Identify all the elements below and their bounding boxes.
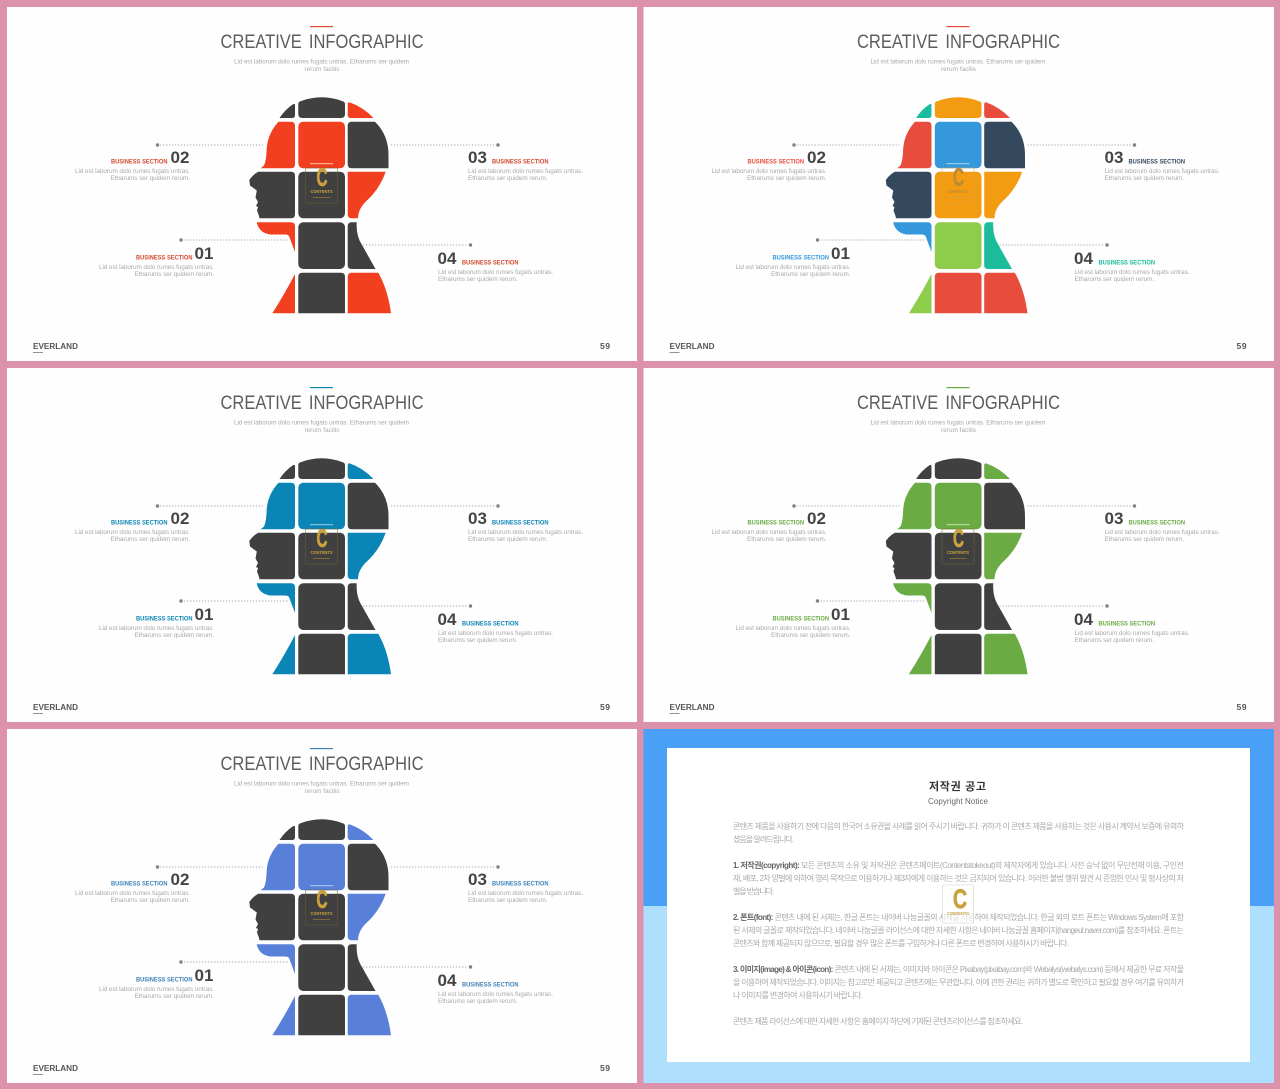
- callout 01: 01: [831, 244, 850, 263]
- footer: EVERLAND: [33, 341, 78, 351]
- logo watermark: CONTENTS: [947, 189, 969, 194]
- font clause: 콘텐츠와 함께 제공되지 않으므로, 필요할 경우 많은 폰트를 구입하거나 다른 폰트로 변경하여 사용하시기 바랍니다.: [733, 938, 1069, 948]
- subtitle: rerum facilis: [304, 427, 340, 434]
- logo watermark: C: [953, 525, 964, 553]
- subtitle: Lid est laborum dolo rumes fugats untras. Etharums ser quidem: [234, 780, 409, 788]
- callout 02: Etharums ser quidem rerum.: [747, 175, 827, 182]
- logo watermark: [942, 524, 974, 564]
- head silhouette: [886, 97, 1028, 313]
- panel: red theme slide: [7, 7, 637, 361]
- callout 03: 03: [1104, 509, 1123, 528]
- callout 02: 02: [170, 509, 189, 528]
- callout 01: BUSINESS SECTION: [772, 254, 829, 262]
- callout 02: Etharums ser quidem rerum.: [110, 536, 190, 543]
- callout 03: Lid est laborum dolo rumes fugats untras.: [1104, 529, 1220, 536]
- callout 03: BUSINESS SECTION: [492, 158, 549, 166]
- panel: green theme slide: [644, 368, 1274, 722]
- title: CREATIVE INFOGRAPHIC: [220, 31, 424, 53]
- panel: multicolor slide: [644, 7, 1274, 361]
- title accent line: [310, 748, 333, 749]
- callout 02: Lid est laborum dolo rumes fugats untras.: [712, 529, 827, 536]
- callout 03: Etharums ser quidem rerum.: [1104, 536, 1184, 543]
- callout 02: [712, 143, 900, 182]
- callout 01: BUSINESS SECTION: [136, 616, 193, 622]
- subtitle: Lid est laborum dolo rumes fugats untras. Etharums ser quidem: [870, 420, 1046, 426]
- footer: 59: [1236, 341, 1247, 351]
- subtitle: rerum facilis: [304, 66, 340, 73]
- subtitle: rerum facilis: [941, 66, 976, 73]
- callout 02: BUSINESS SECTION: [748, 520, 804, 526]
- callout 01: [99, 960, 288, 1000]
- image and icon clause: 나 이미지를 변경하여 사용하시기 바랍니다.: [733, 990, 863, 1000]
- callout 04: Lid est laborum dolo rumes fugats untras.: [438, 269, 553, 276]
- logo watermark: CONTENTS: [310, 189, 332, 194]
- title: CREATIVE INFOGRAPHIC: [857, 31, 1060, 53]
- font clause: [733, 912, 1185, 948]
- callout 01: Lid est laborum dolo rumes fugats untras.: [736, 264, 851, 271]
- callout 04: Etharums ser quidem rerum.: [438, 998, 518, 1005]
- callout 02: Lid est laborum dolo rumes fugats untras.: [75, 529, 190, 536]
- callout 04: Lid est laborum dolo rumes fugats untras.: [438, 991, 553, 998]
- callout 01: 01: [831, 605, 850, 624]
- logo watermark: [942, 884, 974, 923]
- callout 03: 03: [468, 509, 487, 528]
- callout 03: [391, 143, 583, 182]
- callout 03: Lid est laborum dolo rumes fugats untras.: [468, 890, 583, 897]
- callout 04: Etharums ser quidem rerum.: [438, 276, 518, 283]
- callout 02: Etharums ser quidem rerum.: [747, 536, 827, 543]
- callout 03: BUSINESS SECTION: [1128, 520, 1185, 526]
- callout 03: Etharums ser quidem rerum.: [468, 175, 548, 182]
- callout 03: Lid est laborum dolo rumes fugats untras.: [1104, 168, 1220, 175]
- callout 02: Etharums ser quidem rerum.: [110, 897, 190, 904]
- callout 04: BUSINESS SECTION: [1098, 260, 1155, 266]
- callout 02: 02: [807, 148, 826, 167]
- callout 04: Etharums ser quidem rerum.: [1074, 637, 1154, 644]
- callout 03: Etharums ser quidem rerum.: [468, 897, 548, 904]
- footer: 59: [600, 341, 610, 351]
- callout 04: [1000, 243, 1190, 283]
- callout 02: [712, 504, 900, 543]
- panel: copyright notice: [644, 729, 1274, 1083]
- title: CREATIVE INFOGRAPHIC: [220, 753, 424, 775]
- subtitle: rerum facilis: [304, 788, 340, 795]
- title accent line: [310, 387, 333, 388]
- title: CREATIVE INFOGRAPHIC: [857, 392, 1060, 414]
- title accent line: [946, 387, 970, 388]
- callout 03: 03: [468, 148, 487, 167]
- callout 02: Lid est laborum dolo rumes fugats untras.: [75, 168, 190, 175]
- callout 02: BUSINESS SECTION: [111, 520, 168, 526]
- callout 04: BUSINESS SECTION: [462, 260, 519, 266]
- callout 02: 02: [170, 148, 189, 167]
- subtitle: rerum facilis: [941, 427, 976, 434]
- callout 04: [363, 965, 553, 1005]
- license note: 콘텐츠 제품 라이선스에 대한 자세한 사항은 홈페이지 하단에 기재된 콘텐츠라이선스를 참조하세요.: [733, 1016, 1023, 1026]
- footer: [670, 341, 1247, 353]
- intro paragraph: 셨음을 알려드립니다.: [733, 834, 794, 844]
- callout 03: [391, 504, 583, 543]
- callout 03: [1028, 143, 1220, 182]
- callout 02: BUSINESS SECTION: [111, 158, 168, 166]
- callout 01: [736, 599, 924, 639]
- callout 04: BUSINESS SECTION: [462, 982, 519, 988]
- image and icon clause: 을 이용하여 제작되었습니다. 이미지는 참고로만 제공되고 콘텐츠에는 무관합니다. 이에 관한 권리는 귀하가 별도로 확인하고 필요할 경우 여기를 유의하거: [733, 977, 1184, 987]
- footer: [33, 702, 610, 714]
- subtitle: [234, 780, 409, 795]
- callout 03: [1028, 504, 1220, 543]
- callout 01: [736, 238, 924, 278]
- callout 03: 03: [468, 870, 487, 889]
- callout 04: [1000, 604, 1190, 644]
- copyright clause: 1. 저작권(copyright): 모든 콘텐츠의 소유 및 저작권은 콘텐츠메이트(Contentstokeout)의 제작자에게 있습니다. 사전 승낙 없이 무단전재 이용, 구인전: [733, 860, 1184, 870]
- footer: EVERLAND: [670, 702, 714, 712]
- callout 01: [99, 599, 288, 639]
- head silhouette: [886, 458, 1028, 674]
- callout 02: Lid est laborum dolo rumes fugats untras.: [75, 890, 190, 897]
- callout 03: Etharums ser quidem rerum.: [1104, 175, 1184, 182]
- copyright clause: 벌을 받습니다.: [733, 886, 774, 896]
- callout 04: 04: [438, 971, 457, 990]
- logo watermark: C: [953, 884, 967, 914]
- footer: [33, 1063, 610, 1075]
- font clause: 2. 폰트(font): 콘텐츠 내에 된 서체는, 한글 폰트는 네이버 나눔글꼴의 서체를 사용하여 제작되었습니다. 한글 외의 로트 폰트는 Windows System에 포함: [733, 912, 1185, 922]
- notice subheading: Copyright Notice: [928, 797, 989, 806]
- callout 04: 04: [438, 249, 457, 268]
- callout 02: [75, 504, 263, 543]
- subtitle: Lid est laborum dolo rumes fugats untras. Etharums ser quidem: [870, 58, 1046, 66]
- callout 01: BUSINESS SECTION: [136, 976, 193, 984]
- callout 03: Lid est laborum dolo rumes fugats untras.: [468, 168, 583, 175]
- callout 01: Etharums ser quidem rerum.: [771, 632, 851, 639]
- callout 03: BUSINESS SECTION: [1128, 158, 1185, 166]
- callout 04: Etharums ser quidem rerum.: [1074, 276, 1154, 283]
- callout 01: 01: [194, 966, 213, 985]
- subtitle: [870, 420, 1046, 434]
- callout 02: [75, 865, 263, 904]
- intro paragraph: [733, 821, 1185, 844]
- logo watermark: CONTENTS: [310, 911, 332, 916]
- callout 02: 02: [807, 509, 826, 528]
- logo watermark: C: [316, 525, 328, 553]
- callout 04: 04: [438, 610, 457, 629]
- footer: 59: [600, 1063, 610, 1073]
- image and icon clause: [733, 964, 1184, 1000]
- logo watermark: [306, 885, 338, 925]
- subtitle: [234, 420, 409, 434]
- footer: EVERLAND: [33, 702, 78, 712]
- head silhouette: [249, 97, 391, 313]
- callout 02: Lid est laborum dolo rumes fugats untras.: [712, 168, 827, 175]
- callout 01: 01: [194, 244, 213, 263]
- footer: EVERLAND: [33, 1063, 78, 1073]
- callout 03: BUSINESS SECTION: [492, 520, 549, 526]
- callout 01: BUSINESS SECTION: [772, 616, 829, 622]
- callout 04: Lid est laborum dolo rumes fugats untras.: [1074, 269, 1190, 276]
- head silhouette: [249, 819, 391, 1035]
- title accent line: [946, 26, 970, 27]
- title: CREATIVE INFOGRAPHIC: [220, 392, 424, 414]
- callout 01: Etharums ser quidem rerum.: [134, 271, 214, 278]
- callout 04: Etharums ser quidem rerum.: [438, 637, 518, 644]
- title accent line: [310, 26, 333, 27]
- callout 01: Lid est laborum dolo rumes fugats untras.: [736, 625, 851, 632]
- logo watermark: [306, 524, 338, 564]
- callout 01: Etharums ser quidem rerum.: [134, 993, 214, 1000]
- callout 03: BUSINESS SECTION: [492, 880, 549, 888]
- callout 02: BUSINESS SECTION: [111, 880, 168, 888]
- callout 03: Lid est laborum dolo rumes fugats untras.: [468, 529, 583, 536]
- callout 03: [391, 865, 583, 904]
- callout 01: Etharums ser quidem rerum.: [771, 271, 851, 278]
- intro paragraph: 콘텐츠 제품을 사용하기 전에 다음의 한국어 소유권을 사례를 읽어 주시기 바랍니다. 귀하가 이 콘텐츠 제품을 사용하는 것은 사용시 계약서 보증에 유의하: [733, 821, 1185, 831]
- logo watermark: C: [316, 164, 328, 192]
- callout 04: BUSINESS SECTION: [462, 620, 519, 628]
- image and icon clause: 3. 이미지(image) & 아이콘(icon): 콘텐츠 내에 된 서체는, 이미지와 아이콘은 Pixabay(pixabay.com)와 Webalys(webalys.com) 등에서 제공한 무료 저작물: [733, 964, 1184, 974]
- logo watermark: CONTENTS: [947, 550, 969, 555]
- callout 01: BUSINESS SECTION: [136, 254, 193, 262]
- footer: [33, 341, 610, 353]
- callout 03: Etharums ser quidem rerum.: [468, 536, 548, 543]
- footer: 59: [600, 702, 610, 712]
- footer: 59: [1236, 702, 1247, 712]
- head silhouette: [249, 458, 391, 674]
- callout 04: Lid est laborum dolo rumes fugats untras.: [1074, 630, 1190, 637]
- panel: teal-blue theme slide: [7, 368, 637, 722]
- callout 01: Lid est laborum dolo rumes fugats untras.: [99, 625, 214, 632]
- callout 04: Lid est laborum dolo rumes fugats untras.: [438, 630, 553, 637]
- subtitle: [870, 58, 1046, 73]
- callout 02: 02: [170, 870, 189, 889]
- callout 02: [75, 143, 263, 182]
- logo watermark: [306, 163, 338, 203]
- callout 01: Lid est laborum dolo rumes fugats untras.: [99, 986, 214, 993]
- callout 01: Etharums ser quidem rerum.: [134, 632, 214, 639]
- footer: EVERLAND: [670, 341, 714, 351]
- subtitle: [234, 58, 409, 73]
- copyright clause: 재, 배포, 2차 양벌에 의하여 영리 목적으로 이용하거나 제3자에게 이용하는 것은 금지되어 있습니다. 이러한 불법 행위 발견 시 준엄한 민사 및 형사상의 처: [733, 873, 1184, 883]
- callout 01: [99, 238, 288, 278]
- font clause: 된 서체의 글꼴로 제작되었습니다. 네이버 나눔글꼴 라이선스에 대한 자세한 사항은 네이버 나눔글꼴 홈페이지(hangeul.naver.com)를 참조하세요. 폰트는: [733, 925, 1184, 935]
- callout 03: 03: [1104, 148, 1123, 167]
- callout 01: 01: [194, 605, 213, 624]
- logo watermark: CONTENTS: [947, 911, 969, 916]
- callout 04: [363, 604, 553, 644]
- callout 01: Lid est laborum dolo rumes fugats untras.: [99, 264, 214, 271]
- copyright clause: [733, 860, 1184, 896]
- logo watermark: C: [953, 164, 964, 192]
- logo watermark: CONTENTS: [310, 550, 332, 555]
- logo watermark: C: [316, 886, 328, 914]
- notice heading: 저작권 공고: [929, 779, 986, 793]
- panel: periwinkle blue theme slide: [7, 729, 637, 1083]
- callout 04: BUSINESS SECTION: [1098, 620, 1155, 628]
- subtitle: Lid est laborum dolo rumes fugats untras. Etharums ser quidem: [234, 58, 409, 66]
- callout 02: BUSINESS SECTION: [748, 158, 804, 166]
- footer: [670, 702, 1247, 714]
- callout 02: Etharums ser quidem rerum.: [110, 175, 190, 182]
- callout 04: [363, 243, 553, 283]
- callout 04: 04: [1074, 610, 1093, 629]
- subtitle: Lid est laborum dolo rumes fugats untras. Etharums ser quidem: [234, 420, 409, 426]
- callout 04: 04: [1074, 249, 1093, 268]
- logo watermark: [942, 163, 974, 203]
